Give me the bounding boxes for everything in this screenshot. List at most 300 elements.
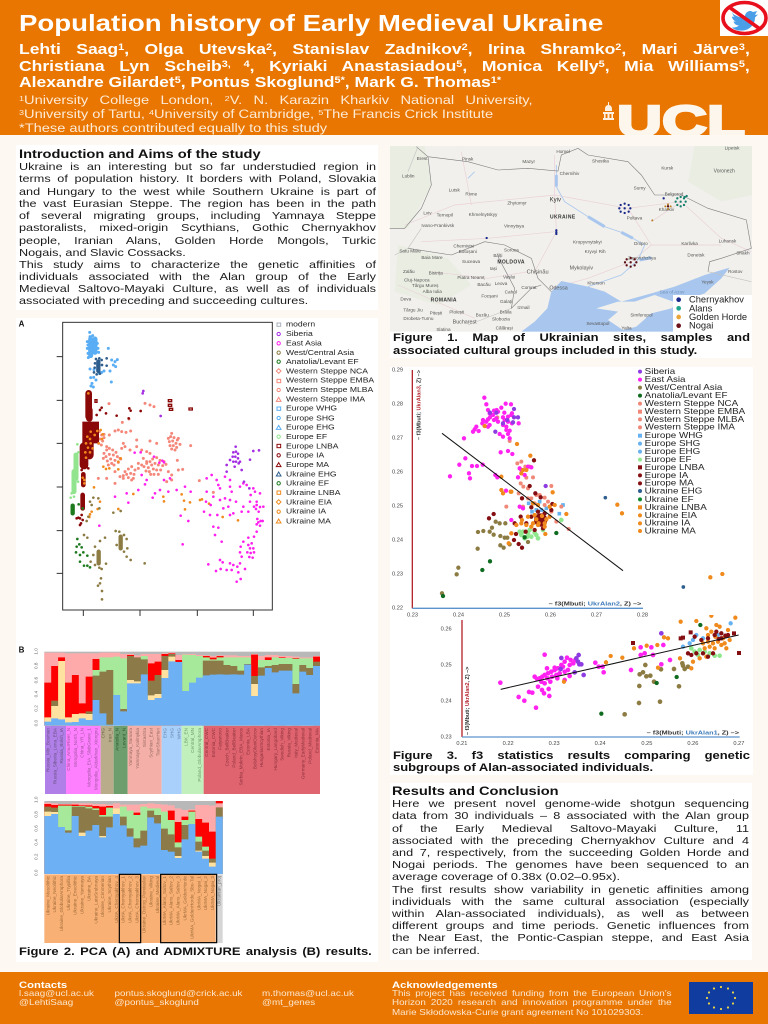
map roads <box>398 152 751 318</box>
lower population labels: Ukraine_Ostrog_Pereiaslav <box>141 875 146 933</box>
PCA legend: Western Steppe EMBA <box>286 376 375 384</box>
title: Population history of Early Medieval Ukraine <box>19 10 603 36</box>
PCA points <box>71 332 263 599</box>
Europe LNBA, IA and MA <box>489 460 552 548</box>
PCA legend: Europe EF <box>286 433 327 441</box>
map place names: Lutsk <box>449 188 460 193</box>
Europe IA and LNBA outliers <box>95 400 192 410</box>
axis tick labels: 0.25 <box>441 663 452 669</box>
axis tick labels: 0.29 <box>392 368 403 374</box>
Ukraine EHG <box>94 358 107 374</box>
axis tick labels: 0.28 <box>392 402 403 408</box>
lower population labels: UkrMA_Alans_Saltov_3 <box>176 876 181 925</box>
lower population labels: UkrIA_Chernyakhov_3 <box>134 876 139 923</box>
map place names: Yalta <box>621 326 632 331</box>
PCA legend: Ukraine EHG <box>286 470 337 478</box>
intro text: Ukraine is an interesting but so far understudied region in <box>19 161 376 173</box>
map place names: Mazyr <box>522 159 535 164</box>
upper population labels: CHG <box>101 728 106 738</box>
caption: figure 2: Figure 2. PCA (A) and ADMIXTURE analysis (B) results. <box>19 946 372 958</box>
contacts: m.thomas@ucl.ac.uk <box>262 989 354 998</box>
PCA legend: Europe LNBA <box>286 442 339 450</box>
map place names: Homel <box>556 149 570 154</box>
lower ADMIXTURE stacked bars <box>44 801 223 874</box>
map place names: Pitești <box>430 310 442 315</box>
lower population colour blocks <box>44 874 223 943</box>
map place names: Shakh <box>736 250 750 255</box>
upper population labels: Anatolia_N <box>114 728 119 751</box>
axis tick labels: 0.24 <box>392 538 403 544</box>
upper population labels: Italy_Medieval <box>294 728 299 758</box>
map place names: Vinnytsya <box>504 224 525 229</box>
map place names: Ploiești <box>449 309 464 314</box>
axis tick labels: 0.26 <box>687 741 698 747</box>
results text: Nogai periods. The genomes have been sequenced to an <box>392 859 749 871</box>
map place names: Belgorod <box>665 192 684 197</box>
map place names: Târgu Mureș <box>412 283 439 288</box>
results text: individuals with the same cultural association (especially <box>392 896 749 908</box>
Ukraine orange groups <box>83 393 238 520</box>
map place names: Pinsk <box>462 157 474 162</box>
East Asia <box>450 398 531 520</box>
authors: Christiana Lyn Scheib3, 4, Kyriaki Anastasiadou5, Monica Kelly5, Mia Williams5, <box>19 58 750 74</box>
upper population labels: Czech_BellBeaker <box>225 728 230 766</box>
regression line <box>501 635 739 689</box>
map place names: Poltava <box>627 216 643 221</box>
upper population labels <box>45 727 319 790</box>
map legend <box>673 294 752 332</box>
contacts <box>19 979 354 1007</box>
map place names: Baia Mare <box>421 255 443 260</box>
upper population labels: Estonia_LBA <box>245 727 250 755</box>
results text <box>392 798 750 957</box>
map place names: Suceava <box>462 259 481 264</box>
panel letter B: B <box>19 646 25 655</box>
intro text: Nogais, and Slavic Cossacks. <box>19 247 186 259</box>
lower population labels: Ukraine_Scythian <box>107 876 112 912</box>
caption: figure 3: Figure 3. f3 statistics results comparing genetic <box>393 750 750 762</box>
chart: PCA scatter <box>18 319 375 616</box>
contacts: @mt_genes <box>262 998 315 1007</box>
Europe EF and Ukraine EF <box>691 648 720 656</box>
axis tick labels: 0.21 <box>456 741 467 747</box>
panel: figure 1 map <box>390 147 752 358</box>
map place names: Sea of Azov <box>660 290 685 295</box>
legend: Europe WHG <box>645 431 703 440</box>
PCA legend: Ukraine IA <box>286 507 327 515</box>
upper ADMIXTURE axis labels: 0.8 <box>34 662 39 669</box>
Anatolia/Levant EF and Ukraine EF <box>443 533 556 596</box>
upper population labels: Swedish_Viking <box>280 728 285 761</box>
map place names: Lipetsk <box>725 145 740 150</box>
results text: The first results show variability in genetic affinities among <box>392 884 749 896</box>
map place names: Vaslui <box>503 274 515 279</box>
panel: figure 2 <box>16 318 378 962</box>
caption: figure 1 <box>393 332 750 356</box>
intro text <box>19 161 376 307</box>
map place names: Lublin <box>402 173 415 178</box>
lower population labels: UkrMA_Nogai_2 <box>203 876 208 910</box>
lower population labels: Ukraine_Trypillia <box>66 876 71 911</box>
map place names: Târgu Jiu <box>403 308 423 313</box>
results text: the Near East, the Pontic-Caspian steppe, and East Asia <box>392 932 749 944</box>
axis tick labels: 0.23 <box>407 613 418 619</box>
results text: and 7, respectively, from the succeeding Golden Horde and <box>392 847 749 859</box>
axis tick labels: 0.24 <box>441 699 452 705</box>
European hunter-gatherers <box>529 502 563 514</box>
lower population labels: Ukraine_Viking <box>148 876 153 907</box>
intro text: people, Iranian Alans, Golden Horde Mongols, Turkic <box>19 234 376 246</box>
legend: Western Steppe EMBA <box>645 407 745 416</box>
map place names: Kropyvnytskyi <box>573 240 602 245</box>
map place names: Brest <box>417 156 428 161</box>
axis tick labels: 0.23 <box>549 741 560 747</box>
Kyiv label: Kyiv <box>550 198 561 204</box>
PCA legend: Western Steppe MLBA <box>286 386 374 394</box>
legend: Europe MA <box>645 478 694 487</box>
Europe EF <box>71 444 78 498</box>
results text: Here we present novel genome-wide shotgun sequencing <box>392 798 749 810</box>
axis tick labels: 0.28 <box>637 613 648 619</box>
UCL logo <box>603 100 745 135</box>
intro text: pastoralists, mixed-origin Scythians, Gothic Chernyakhov <box>19 222 376 234</box>
upper population labels: Central_CWC <box>204 727 209 757</box>
map forest tints <box>390 146 752 305</box>
lower ADMIXTURE axis labels: 0.4 <box>34 839 39 846</box>
PCA legend: modern <box>286 320 315 328</box>
axis tick labels: 0.23 <box>441 735 452 741</box>
upper population labels: Mongolia_EIA_SlabGrave_1 <box>87 728 92 787</box>
map place names: Călărași <box>496 325 513 330</box>
map place names: Odessa <box>549 285 568 291</box>
axis tick labels: 0.25 <box>499 613 510 619</box>
heading: introduction: Introduction and Aims of the study <box>19 147 261 161</box>
upper population labels: Poland_GlobularAmphora <box>197 728 202 782</box>
icon: crossed-out Twitter bird <box>720 0 768 36</box>
lower population labels: UkrMA_Nogai_3 <box>210 876 215 910</box>
lower population labels: UkrIA_Chernyakhov_4 <box>114 876 119 923</box>
upper population labels: Poland_Medieval <box>307 728 312 764</box>
axes <box>462 620 740 737</box>
map legend: Golden Horde <box>689 312 747 322</box>
upper population labels: China_YR_LN <box>80 728 85 758</box>
map place names: Botoșani <box>459 249 477 254</box>
caption: figure 3: subgroups of Alan-associated individuals. <box>393 762 653 774</box>
map country names: MOLDOVA <box>497 260 525 266</box>
upper population labels: Levant_N <box>121 728 126 748</box>
map rivers <box>468 165 651 287</box>
map legend: Nogai <box>689 321 713 331</box>
authors <box>19 42 750 91</box>
map place names: Luhansk <box>719 238 737 243</box>
Anatolia and Ukraine EF <box>73 504 90 567</box>
axis tick labels: 0.27 <box>733 741 744 747</box>
authors: Alexandre Gilardet5, Pontus Skoglund5*, Mark G. Thomas1* <box>19 75 501 91</box>
sample site markers <box>487 196 687 267</box>
legend: Europe LNBA <box>645 463 705 472</box>
axis tick labels: 0.26 <box>545 613 556 619</box>
upper population labels: LBK_EN <box>183 728 188 746</box>
panel: figure 3 charts <box>390 367 753 775</box>
Western Steppe groups <box>98 403 213 492</box>
affiliations: *These authors contributed equally to this study <box>19 120 327 134</box>
upper population labels: Serbia_Mokrin_EBA_Maros <box>238 727 243 785</box>
upper population labels: Mongolia_Aldarkhan_Xiongnu <box>94 728 99 790</box>
axis tick labels: 0.25 <box>392 504 403 510</box>
authors: Lehti Saag1, Olga Utevska2, Stanislav Zadnikov2, Irina Shramko2, Mari Järve3, <box>19 42 750 58</box>
map place names: Izmail <box>517 305 530 310</box>
legend: Siberia <box>645 367 676 376</box>
map place names: Khmelnytskyy <box>469 212 498 217</box>
PCA axes <box>57 322 272 616</box>
map place names: Kursk <box>661 166 674 171</box>
upper population labels: Germany_EarlyMedieval <box>300 728 305 779</box>
PCA legend: Europe SHG <box>286 414 335 422</box>
caption: figure 1: Figure 1. Map of Ukrainian sites, samples and <box>393 332 750 344</box>
acknowledgements: Acknowledgements <box>392 979 498 990</box>
map place names: Kryvyi Rih <box>585 249 606 254</box>
legend: Western Steppe MLBA <box>645 415 744 424</box>
upper ADMIXTURE axis labels: 0.6 <box>34 676 39 683</box>
Europe hunter-gatherers <box>683 623 731 647</box>
Anatolia/Levant EF <box>601 625 700 714</box>
lower population labels: UkrIA_Chernyakhov_1 <box>121 876 126 923</box>
map place names: Yeysk <box>701 280 714 285</box>
PCA legend: Siberia <box>286 330 313 338</box>
results text: can be inferred. <box>392 945 480 957</box>
legend: Ukraine EF <box>645 495 694 504</box>
axis titles: – f3(Mbuti; UkrAlan1 , Z) –> <box>647 730 739 736</box>
chart: f3 statistics UkrAlan2 vs UkrAlan3 <box>392 367 746 619</box>
intro text: and Hungary to the west while Southern Ukraine is part of <box>19 186 376 198</box>
PCA legend: West/Central Asia <box>286 349 355 357</box>
map sea <box>521 268 730 332</box>
upper population labels: BolshoyOleniOstrov <box>252 727 257 769</box>
PCA legend: Europe EHG <box>286 423 335 431</box>
Europe LNBA, IA and MA <box>77 393 141 525</box>
map place names: Leova <box>495 281 508 286</box>
lower population labels: Ukraine_GlobularAmphora <box>59 876 64 931</box>
legend: Western Steppe NCA <box>645 399 738 408</box>
map place names: Donetsk <box>687 252 705 257</box>
Ukraine orange mass <box>564 616 735 682</box>
PCA legend: Anatolia/Levant EF <box>286 358 359 366</box>
East Asia <box>500 645 670 708</box>
map place names: Chișinău <box>527 269 549 275</box>
panel letter A: A <box>19 319 25 328</box>
axis tick labels: 0.26 <box>392 470 403 476</box>
Western Steppe <box>497 417 569 529</box>
axis tick labels: 0.24 <box>595 741 606 747</box>
upper ADMIXTURE axis labels: 0.0 <box>34 719 39 726</box>
legend: Ukraine MA <box>645 526 696 535</box>
West/Central Asia <box>442 522 528 593</box>
upper population labels: Estonia_IA <box>266 727 271 751</box>
affiliations: 3University of Tartu, 4University of Cambridge, 5The Francis Crick Institute <box>19 107 493 121</box>
lower population labels <box>45 875 222 939</box>
map place names: Kharkiv <box>659 207 675 212</box>
map place names: Simferopol <box>630 312 653 317</box>
map place names: Alba Iulia <box>423 289 442 294</box>
acknowledgements: Marie Skłodowska-Curie grant agreement No 101029303. <box>392 1008 643 1016</box>
legend: Europe IA <box>645 471 688 480</box>
caption: figure 3 <box>393 750 750 774</box>
Siberia <box>561 633 661 675</box>
legend <box>640 367 745 535</box>
upper population labels: Poland_BellBeaker <box>231 728 236 768</box>
scatter points <box>442 398 722 596</box>
acknowledgements: Horizon 2020 research and innovation programme under the <box>392 998 672 1007</box>
map place names: Kherson <box>587 280 605 285</box>
intro text: Medieval Saltovo-Mayaki Culture, as well as of individuals <box>19 283 376 295</box>
axis titles: – f3(Mbuti; UkrAlan2 , Z) –> <box>549 601 641 607</box>
upper population labels: Sintashta <box>142 728 147 747</box>
upper population labels: China_AmurRiver_N <box>66 728 71 771</box>
map place names: Ternopil <box>437 212 453 217</box>
contacts: pontus.skoglund@crick.ac.uk <box>115 989 242 998</box>
lower ADMIXTURE axis labels: 1.0 <box>34 796 39 803</box>
map place names: Zaporizhzhya <box>628 256 656 261</box>
map place names: Rivne <box>465 192 478 197</box>
results text: within Alan-associated individuals), as well as between <box>392 908 749 920</box>
lower population labels: Ukrainian_proj <box>217 876 222 906</box>
contacts: l.saag@ucl.ac.uk <box>19 989 94 998</box>
lower population labels: Ukraine_Cimmerian <box>100 876 105 917</box>
lower population labels: Ukraine_Medieval <box>155 876 160 913</box>
lower population labels: Ukraine_LateSrubnaya <box>93 876 98 924</box>
upper population labels: Yamnaya_Samara <box>128 728 133 766</box>
contacts: @pontus_skoglund <box>115 998 199 1007</box>
chart: f3 statistics UkrAlan1 vs UkrAlan2 <box>440 615 744 747</box>
upper population labels: Russia_Siberia_Lena_EBA <box>52 727 57 784</box>
lower ADMIXTURE axis labels <box>34 796 39 876</box>
results text: of the Early Medieval Saltovo-Mayaki Culture, 11 <box>392 823 749 835</box>
upper population labels: Fatyanovo <box>218 728 223 750</box>
upper population labels: Hungary_Langobard <box>273 728 278 770</box>
PCA legend: Ukraine EIA <box>286 498 333 506</box>
caption: figure 1: associated cultural groups included in this study. <box>393 344 697 356</box>
East Asia <box>99 452 263 582</box>
legend: Europe EF <box>645 455 692 464</box>
upper population labels: EHG <box>163 728 168 738</box>
axis tick labels: 0.22 <box>503 741 514 747</box>
map legend: Alans <box>689 303 713 313</box>
scatter points <box>500 616 739 714</box>
map place names: Bacău <box>477 282 491 287</box>
upper population labels: SHG <box>169 728 174 738</box>
map place names: Bălți <box>493 253 502 258</box>
lower ADMIXTURE axis labels: 0.8 <box>34 811 39 818</box>
upper population labels: TianShanHun <box>156 728 161 756</box>
lower population labels: UkrMA_Nogai_1 <box>196 876 201 910</box>
regression line <box>442 433 623 571</box>
PCA legend: Ukraine MA <box>286 517 332 525</box>
axis tick labels <box>392 368 648 619</box>
header band <box>0 0 768 135</box>
map place names: Buzău <box>476 312 489 317</box>
PCA legend: Western Steppe IMA <box>286 395 366 403</box>
PCA legend: Ukraine LNBA <box>286 489 341 497</box>
upper ADMIXTURE stacked bars <box>44 652 320 726</box>
intro text: This study aims to characterize the genetic affinities of <box>19 259 376 271</box>
legend: Ukraine IA <box>645 518 690 527</box>
legend: Europe SHG <box>645 439 700 448</box>
map place names: Comrat <box>521 285 537 290</box>
axis tick labels <box>441 627 744 747</box>
map land <box>390 146 752 332</box>
map legend: Chernyakhov <box>689 294 744 304</box>
map place names: Bistrița <box>429 270 443 275</box>
legend: Western Steppe IMA <box>645 422 735 431</box>
PCA legend: Europe MA <box>286 461 330 469</box>
axis tick labels: 0.23 <box>392 572 403 578</box>
panel: introduction and aims <box>16 145 378 310</box>
acknowledgements: This project has received funding from the European Union’s <box>392 989 672 998</box>
axis tick labels: 0.27 <box>591 613 602 619</box>
map place names: Iași <box>490 266 497 271</box>
map place names: Rostov <box>728 269 743 274</box>
affiliations <box>19 93 533 134</box>
lower population labels: Ukraine_Eneolithic <box>73 875 78 915</box>
upper population labels: Yamnaya_Kalmykia <box>135 728 140 769</box>
intro text: individuals associated with the Alan group of the Early <box>19 271 376 283</box>
upper population labels: Scythian_East <box>149 727 154 758</box>
PCA legend: Western Steppe NCA <box>286 367 369 375</box>
upper ADMIXTURE axis labels: 1.0 <box>34 648 39 655</box>
map place names: Drobeta-Turnu <box>403 316 434 321</box>
upper population labels: Russia_Bolsh_IA <box>59 727 64 763</box>
upper population labels: Estonia_MA <box>314 727 319 753</box>
axis tick labels: 0.24 <box>453 613 464 619</box>
PCA legend: Ukraine EF <box>286 479 329 487</box>
y axis title: – f3(Mbuti; UkrAlan2, Z) –> <box>465 667 471 735</box>
lower ADMIXTURE axis labels: 0.6 <box>34 825 39 832</box>
map place names: Chernivtsi <box>453 244 474 249</box>
map borders <box>390 147 751 325</box>
lower ADMIXTURE axis labels: 0.2 <box>34 853 39 860</box>
map place names: Shostka <box>592 158 609 163</box>
icon: EU flag <box>689 982 753 1014</box>
map place names: Focșani <box>481 294 498 299</box>
upper population labels: Estonia_CWC <box>211 727 216 757</box>
axis tick labels: 0.27 <box>392 436 403 442</box>
lower population labels: UkrMA_Alans_Saltov_1 <box>162 876 167 925</box>
chart: ADMIXTURE bars <box>19 646 320 944</box>
lower population labels: Ukraine_Mesolithic <box>45 875 50 915</box>
map place names: Karlivka <box>681 241 698 246</box>
upper population labels: Mongolia_North_N <box>73 728 78 767</box>
axis tick labels: 0.22 <box>392 605 403 611</box>
PCA legend <box>276 320 375 525</box>
upper population labels: HungarianScythian <box>259 728 264 767</box>
lower population labels: UkrMA_GoldenHorde <box>183 876 188 921</box>
intro text: associated with preceding and succeeding cultures. <box>19 295 308 307</box>
legend: Ukraine LNBA <box>645 503 707 512</box>
Europe hunter-gatherers <box>87 332 117 387</box>
map place names: Slatina <box>436 327 451 332</box>
legend: Ukraine EHG <box>645 486 702 495</box>
map place names: Zalău <box>403 269 415 274</box>
map place names: Bucharest <box>453 319 477 325</box>
axis tick labels: 0.26 <box>441 627 452 633</box>
upper population colour blocks <box>45 726 320 794</box>
map Crimea <box>596 295 678 330</box>
map place names: Mykolayiv <box>570 266 593 272</box>
lower ADMIXTURE axis labels: 0.0 <box>34 869 39 876</box>
map country names <box>431 215 576 304</box>
map place names: Ivano-Frankivsk <box>421 223 455 228</box>
upper population labels: Russia_Viking <box>287 728 292 757</box>
